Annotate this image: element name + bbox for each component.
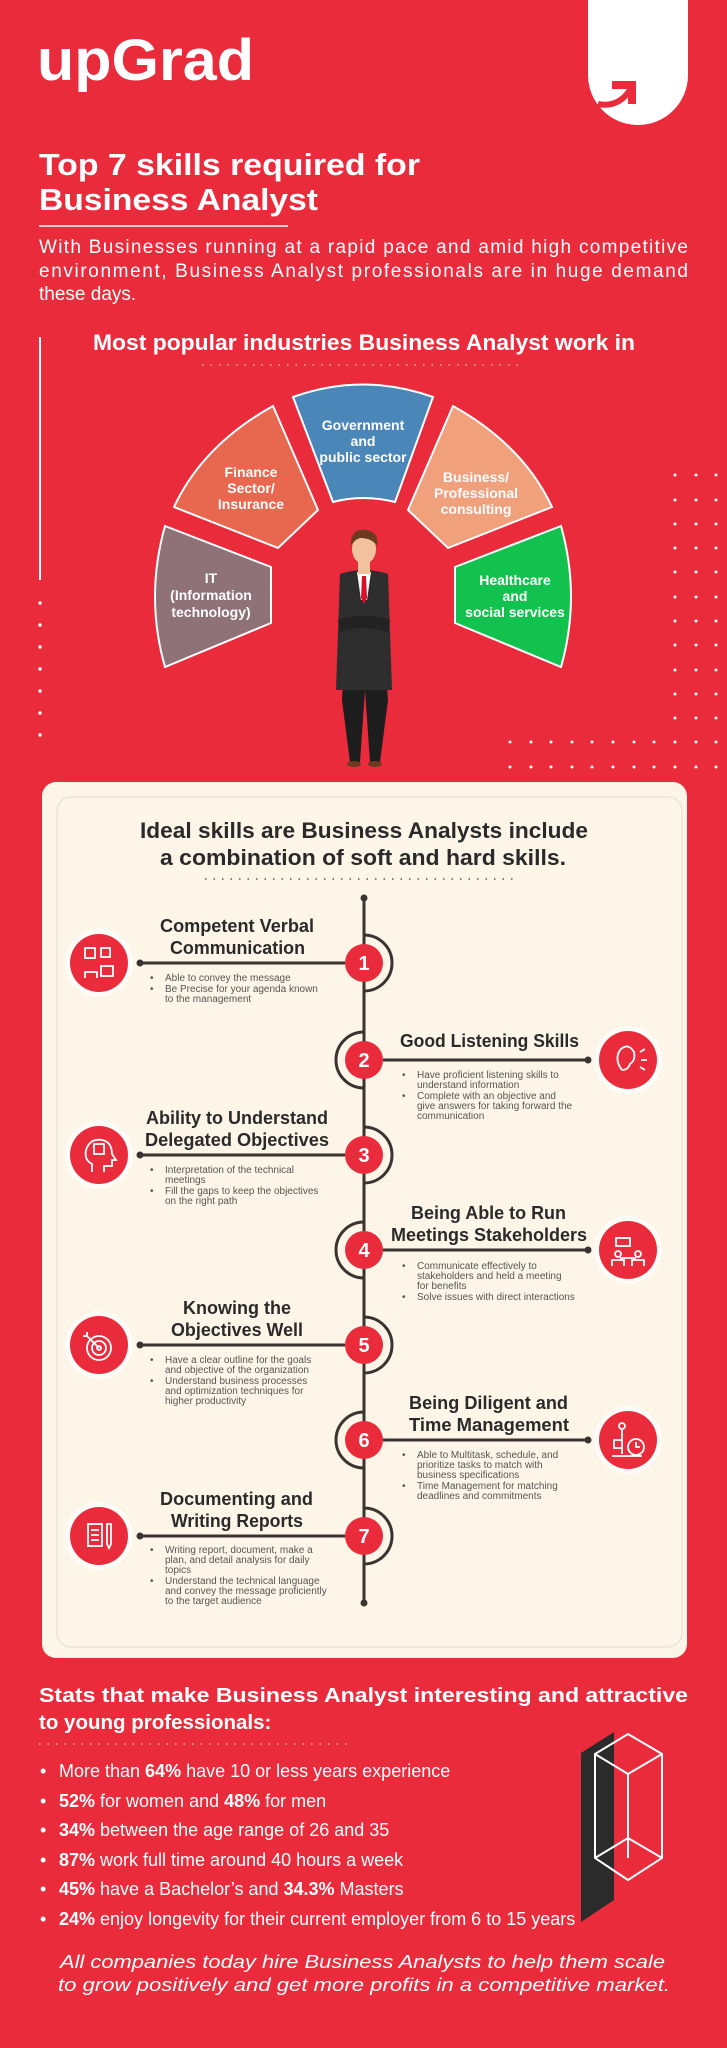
skill bullets: prioritize tasks to match with — [417, 1460, 543, 1471]
skill bullets: • — [150, 1355, 154, 1366]
illustration: businessman — [336, 530, 392, 767]
segment: Business consulting — [408, 406, 552, 548]
skill bullets: • — [150, 973, 154, 984]
segment: Government: public sector — [319, 449, 407, 465]
title: Top 7 skills required for — [39, 147, 420, 182]
icon: upGrad tab with arrow — [588, 0, 688, 125]
number badges: 1 — [358, 953, 370, 975]
segment: Healthcare: Healthcare — [479, 572, 551, 588]
skill bullets: stakeholders and held a meeting — [417, 1271, 562, 1282]
skill bullets: • — [402, 1091, 406, 1102]
skill bullets: on the right path — [165, 1196, 237, 1207]
intro text: these days. — [39, 284, 136, 305]
panel heading — [140, 818, 588, 870]
skill bullets: Solve issues with direct interactions — [417, 1292, 575, 1303]
skill headings: Documenting and — [160, 1489, 313, 1509]
skill bullets: communication — [417, 1111, 484, 1122]
skill bullets: give answers for taking forward the — [417, 1101, 573, 1112]
skill bullets: • — [150, 1576, 154, 1587]
stats list: 34% between the age range of 26 and 35 — [59, 1820, 389, 1840]
segment: Government: Government — [322, 417, 405, 433]
skill bullets: and objective of the organization — [165, 1365, 309, 1376]
skill bullets: deadlines and commitments — [417, 1491, 542, 1502]
skill bullets: business specifications — [417, 1470, 519, 1481]
skill bullets: Time Management for matching — [417, 1481, 558, 1492]
panel: skills — [42, 782, 687, 1658]
stats list: 52% for women and 48% for men — [59, 1791, 326, 1811]
skill bullets: • — [150, 1545, 154, 1556]
segment: Healthcare — [455, 526, 571, 667]
skill bullets: Understand business processes — [165, 1376, 307, 1387]
segment: Business consulting: Business/ — [443, 469, 509, 485]
stats list: • — [40, 1761, 46, 1781]
skill headings: Being Able to Run — [411, 1203, 566, 1223]
skill bullets: to the management — [165, 994, 251, 1005]
segment: IT: (Information — [170, 587, 252, 603]
skill bullets: • — [402, 1481, 406, 1492]
skill bullets: • — [402, 1292, 406, 1303]
skill headings: Ability to Understand — [146, 1108, 328, 1128]
timeline — [140, 894, 588, 1606]
panel heading: a combination of soft and hard skills. — [160, 845, 566, 870]
skill bullets: • — [150, 1165, 154, 1176]
icon: building — [581, 1732, 662, 1922]
skill headings: Delegated Objectives — [145, 1130, 329, 1150]
skill bullets: Complete with an objective and — [417, 1091, 556, 1102]
stats list: 87% work full time around 40 hours a week — [59, 1850, 404, 1870]
segment: Healthcare: social services — [465, 604, 565, 620]
skill headings: Being Diligent and — [409, 1393, 568, 1413]
segment: IT — [155, 526, 271, 667]
skill bullets: Have proficient listening skills to — [417, 1070, 559, 1081]
skill headings: Competent Verbal — [160, 916, 314, 936]
title — [39, 147, 420, 217]
skill headings: Time Management — [409, 1415, 569, 1435]
number badges: 7 — [358, 1526, 370, 1548]
skill headings: Objectives Well — [171, 1320, 303, 1340]
segment: Business consulting: Professional — [434, 485, 518, 501]
segment: IT: technology) — [171, 604, 251, 620]
segment: Finance: Finance — [225, 464, 278, 480]
intro text: environment, Business Analyst professionals are in huge demand — [39, 261, 688, 282]
skill bullets: Writing report, document, make a — [165, 1545, 313, 1556]
segment: Government: and — [351, 433, 375, 449]
skill bullets — [150, 973, 575, 1607]
skill bullets: • — [402, 1261, 406, 1272]
number badges: 6 — [358, 1430, 370, 1452]
skill bullets: for benefits — [417, 1281, 466, 1292]
stats list: • — [40, 1791, 46, 1811]
skill bullets: • — [402, 1070, 406, 1081]
skill bullets: Able to Multitask, schedule, and — [417, 1450, 558, 1461]
heading: industries: Most popular industries Business Analyst work in — [93, 330, 635, 355]
logo: upGrad: upGrad — [37, 28, 254, 93]
skill bullets: Communicate effectively to — [417, 1261, 537, 1272]
number badges: 4 — [358, 1240, 370, 1262]
segment: Finance: Insurance — [218, 496, 284, 512]
segment: Government — [293, 384, 433, 502]
skill headings: Good Listening Skills — [400, 1031, 579, 1051]
panel heading: Ideal skills are Business Analysts include — [140, 818, 588, 843]
skill headings: Communication — [170, 938, 305, 958]
skill bullets: Have a clear outline for the goals — [165, 1355, 311, 1366]
heading: stats: to young professionals: — [39, 1711, 271, 1734]
closing statement: to grow positively and get more profits in a competitive market. — [58, 1974, 670, 1995]
number badges: 5 — [358, 1335, 370, 1357]
skill bullets: to the target audience — [165, 1596, 262, 1607]
segment: Business consulting: consulting — [441, 501, 511, 517]
closing statement: All companies today hire Business Analysts to help them scale — [59, 1951, 665, 1972]
skill bullets: Interpretation of the technical — [165, 1165, 294, 1176]
intro text: With Businesses running at a rapid pace and amid high competitive — [39, 237, 688, 258]
stats list — [40, 1761, 575, 1929]
stats list: • — [40, 1850, 46, 1870]
skill headings: Writing Reports — [171, 1511, 303, 1531]
stats list: 24% enjoy longevity for their current employer from 6 to 15 years — [59, 1909, 575, 1929]
skill bullets: meetings — [165, 1175, 206, 1186]
skill bullets: and convey the message proficiently — [165, 1586, 327, 1597]
skill bullets: • — [150, 1376, 154, 1387]
skill bullets: and optimization techniques for — [165, 1386, 304, 1397]
skill bullets: • — [150, 984, 154, 995]
skill bullets: Be Precise for your agenda known — [165, 984, 318, 995]
skill bullets: Fill the gaps to keep the objectives — [165, 1186, 318, 1197]
skill icons — [65, 929, 662, 1570]
skill headings: Knowing the — [183, 1298, 291, 1318]
skill bullets: plan, and detail analysis for daily — [165, 1555, 310, 1566]
title: Business Analyst — [39, 182, 318, 217]
skill bullets: Able to convey the message — [165, 973, 291, 984]
skill headings — [145, 916, 587, 1531]
segment: Finance — [174, 406, 318, 548]
heading: stats: Stats that make Business Analyst interesting and attractive — [39, 1684, 688, 1707]
skill bullets: higher productivity — [165, 1396, 246, 1407]
skill bullets: Understand the technical language — [165, 1576, 320, 1587]
number badges — [345, 944, 383, 1555]
skill headings: Meetings Stakeholders — [391, 1225, 587, 1245]
chart: industries fan — [155, 384, 571, 667]
skill bullets: topics — [165, 1565, 191, 1576]
number badges: 3 — [358, 1145, 370, 1167]
stats list: • — [40, 1820, 46, 1840]
number badges: 2 — [358, 1050, 370, 1072]
closing statement — [58, 1951, 670, 1995]
stats list: More than 64% have 10 or less years experience — [59, 1761, 450, 1781]
skill bullets: • — [402, 1450, 406, 1461]
segment: Finance: Sector/ — [227, 480, 275, 496]
intro text — [39, 237, 688, 305]
heading: stats — [39, 1684, 688, 1734]
skill bullets: understand information — [417, 1080, 519, 1091]
stats list: • — [40, 1909, 46, 1929]
skill bullets: • — [150, 1186, 154, 1197]
stats list: • — [40, 1879, 46, 1899]
segment: IT: IT — [205, 570, 218, 586]
stats list: 45% have a Bachelor’s and 34.3% Masters — [59, 1879, 404, 1899]
segment: Healthcare: and — [503, 588, 527, 604]
